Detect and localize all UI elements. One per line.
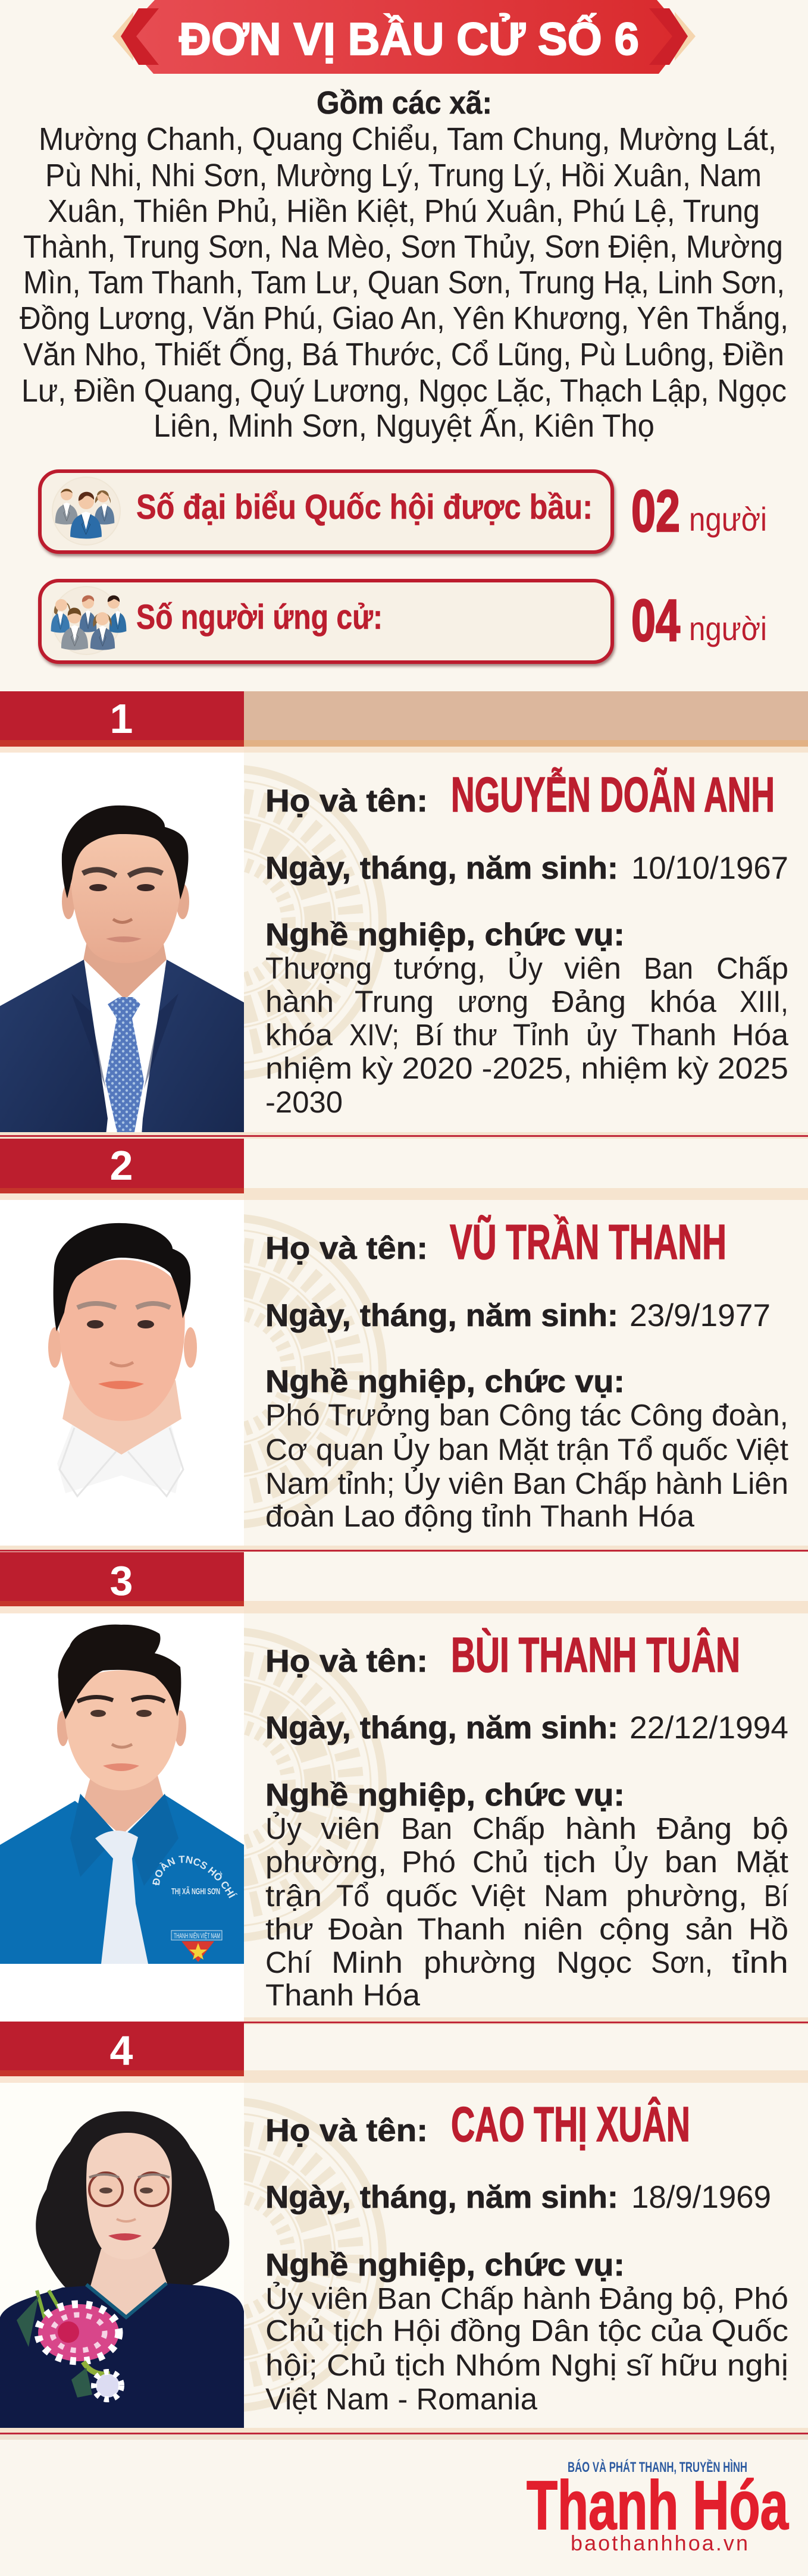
occupation 3: niên	[523, 1912, 583, 1946]
name row 3	[265, 1627, 740, 1682]
occupation 3: Tổ	[336, 1879, 369, 1913]
occupation 3: Phó	[402, 1845, 456, 1879]
stat box	[40, 471, 612, 552]
occupation 1: tướng,	[394, 951, 486, 985]
candidate name: CAO THỊ XUÂN	[451, 2096, 690, 2152]
header band 2	[0, 1139, 808, 1200]
occupation 4: Việt Nam - Romania	[265, 2382, 538, 2416]
icon: five people	[51, 587, 126, 654]
occupation 4: Nghề nghiệp, chức vụ:	[265, 2248, 625, 2283]
divider 3-4	[244, 2017, 808, 2025]
occupation 3: phường,	[265, 1845, 387, 1879]
birth date 3: 22/12/1994	[630, 1710, 788, 1745]
name row 1	[265, 767, 775, 822]
header band 1	[0, 691, 808, 753]
birth date 1: Ngày, tháng, năm sinh:	[265, 851, 618, 886]
occupation 1	[265, 917, 789, 1119]
occupation 1: ương	[458, 985, 528, 1019]
watermark drum	[244, 1628, 387, 1942]
birth date 1	[265, 851, 788, 886]
occupation 1: Tỉnh	[513, 1018, 569, 1052]
shirt badge	[152, 1856, 238, 1962]
divider 2-3	[0, 1546, 808, 1552]
bottom divider	[0, 2428, 808, 2440]
occupation 3: viên	[321, 1812, 380, 1845]
occupation 1: Chấp	[716, 951, 788, 985]
occupation 4: hội; Chủ tịch Nhóm Nghị sĩ hữu nghị	[265, 2348, 788, 2382]
occupation 1: Trung	[355, 985, 434, 1019]
occupation 3: Ngọc	[556, 1945, 632, 1979]
watermark drum	[244, 765, 387, 1079]
number 2: 2	[110, 1142, 133, 1189]
occupation 1: hành	[265, 985, 334, 1019]
occupation 1: -2030	[265, 1085, 343, 1119]
occupation 3: ban	[665, 1845, 718, 1879]
occupation 4	[265, 2248, 788, 2416]
occupation 2	[265, 1364, 788, 1533]
occupation 1: thư	[453, 1018, 497, 1052]
occupation 1: XIII,	[740, 985, 788, 1019]
commune names	[20, 121, 788, 444]
occupation 3: Sơn,	[651, 1945, 713, 1979]
occupation 1: nhiệm kỳ 2020 -2025, nhiệm kỳ 2025	[265, 1051, 788, 1085]
stat number: 04	[631, 587, 680, 653]
birth date 4: Ngày, tháng, năm sinh:	[265, 2180, 618, 2215]
birth date 2: Ngày, tháng, năm sinh:	[265, 1298, 618, 1333]
candidate 3	[0, 1552, 808, 2022]
footer logo	[527, 2459, 789, 2555]
icon: three people	[52, 477, 120, 545]
occupation 3: Ủy	[265, 1811, 302, 1845]
occupation 3: cộng	[599, 1912, 670, 1946]
shirt badge: THANH NIÊN VIỆT NAM	[174, 1931, 220, 1940]
stat unit: người	[689, 610, 767, 647]
occupation 3: quốc	[386, 1879, 458, 1913]
occupation 3: sản	[685, 1912, 733, 1946]
number 3: 3	[110, 1557, 133, 1604]
occupation 3: Bí	[764, 1879, 788, 1913]
divider 1-2	[0, 1132, 808, 1139]
birth date 4: 18/9/1969	[631, 2180, 771, 2215]
watermark drum	[244, 2098, 387, 2412]
occupation 1: Bí	[415, 1018, 443, 1052]
shirt badge: ĐOÀN TNCS HỒ CHÍ MINH	[152, 1856, 238, 1898]
occupation 2: Nam tỉnh; Ủy viên Ban Chấp hành Liên	[265, 1466, 788, 1500]
occupation 1: ủy	[586, 1018, 617, 1052]
name row 2	[265, 1214, 726, 1270]
commune names: Liên, Minh Sơn, Nguyệt Ấn, Kiên Thọ	[154, 408, 654, 444]
candidate 1	[0, 691, 808, 1135]
portrait 1	[0, 753, 244, 1135]
number 1: 1	[110, 695, 133, 742]
number 4: 4	[110, 2027, 133, 2074]
occupation 1: XIV;	[349, 1018, 399, 1052]
stat: deputies to elect	[40, 471, 767, 552]
occupation 1: Thượng	[265, 951, 372, 985]
occupation 3: Đoàn	[328, 1912, 403, 1946]
birth date 2	[265, 1298, 771, 1333]
occupation 3: Mặt	[735, 1845, 788, 1879]
label: full name: Họ và tên:	[265, 784, 428, 819]
title text: ĐƠN VỊ BẦU CỬ SỐ 6	[179, 13, 639, 65]
occupation 3: tỉnh	[732, 1945, 788, 1979]
occupation 2: đoàn Lao động tỉnh Thanh Hóa	[265, 1499, 695, 1533]
birth date 2: 23/9/1977	[630, 1298, 771, 1333]
birth date 3	[265, 1710, 788, 1745]
occupation 3: Chấp	[472, 1812, 545, 1845]
occupation 3: Việt	[471, 1879, 525, 1913]
commune list	[20, 85, 788, 444]
occupation 3: Chủ	[472, 1845, 528, 1879]
occupation 3: tịch	[544, 1845, 596, 1879]
occupation 3: Thanh	[417, 1912, 506, 1946]
portrait 2	[0, 1200, 244, 1546]
occupation 3: thư	[265, 1912, 314, 1946]
occupation 3: Ban	[401, 1812, 452, 1845]
occupation 4: Chủ tịch Hội đồng Dân tộc của Quốc	[265, 2314, 788, 2348]
name row 3: Họ và tên:	[265, 1644, 428, 1679]
occupation 3: Chí	[265, 1945, 312, 1979]
shirt badge: THỊ XÃ NGHI SƠN	[171, 1886, 220, 1897]
stat box	[40, 581, 612, 662]
occupation 3: Thanh Hóa	[265, 1978, 421, 2012]
name row 4: Họ và tên:	[265, 2113, 428, 2148]
commune names: Xuân, Thiên Phủ, Hiền Kiệt, Phú Xuân, Phú Lệ, Trung	[48, 193, 760, 229]
occupation 2: Cơ quan Ủy ban Mặt trận Tổ quốc Việt	[265, 1432, 788, 1466]
occupation 3: phường	[424, 1945, 536, 1979]
stat unit: người	[689, 500, 767, 538]
occupation 3: Minh	[331, 1945, 403, 1979]
stat label: Số đại biểu Quốc hội được bầu:	[136, 488, 593, 527]
stat label: Số người ứng cử:	[136, 598, 383, 637]
occupation 3: Nam	[544, 1879, 608, 1913]
occupation 3: trận	[265, 1879, 322, 1913]
stat: candidates	[40, 581, 767, 662]
portrait 4	[0, 2083, 244, 2428]
name row 2: Họ và tên:	[265, 1231, 428, 1266]
occupation 2: Nghề nghiệp, chức vụ:	[265, 1364, 625, 1399]
occupation 2: Phó Trưởng ban Công tác Công đoàn,	[265, 1398, 788, 1432]
occupation 3: Hồ	[749, 1912, 788, 1946]
watermark drum	[244, 1214, 387, 1528]
occupation 3: phường,	[626, 1879, 747, 1913]
birth date 1: 10/10/1967	[631, 851, 788, 886]
occupation 1: Đảng	[552, 985, 626, 1019]
occupation 1: Hóa	[732, 1018, 789, 1052]
website: baothanhhoa.vn	[571, 2531, 748, 2555]
candidate 4	[0, 2022, 808, 2428]
commune names: Pù Nhi, Nhi Sơn, Mường Lý, Trung Lý, Hồi Xuân, Nam	[45, 158, 762, 193]
commune names: Mường Chanh, Quang Chiểu, Tam Chung, Mường Lát,	[39, 121, 776, 157]
occupation 3	[265, 1778, 788, 2012]
occupation 1: khóa	[265, 1018, 333, 1052]
embroidered flower	[17, 2290, 121, 2399]
title banner	[112, 0, 696, 74]
occupation 1: viên	[564, 951, 621, 985]
occupation 3: Đảng	[657, 1812, 732, 1845]
name row 4	[265, 2096, 690, 2152]
occupation 1: Nghề nghiệp, chức vụ:	[265, 917, 625, 952]
occupation 1: Ủy	[508, 951, 543, 985]
birth date 4	[265, 2180, 771, 2215]
occupation 1: khóa	[650, 985, 717, 1019]
occupation 3: Ủy	[613, 1844, 648, 1879]
occupation 1: Ban	[644, 951, 693, 985]
portrait 3	[0, 1613, 244, 2022]
occupation 3: bộ	[752, 1812, 788, 1845]
occupation 1: Thanh	[631, 1018, 716, 1052]
header band 3	[0, 1552, 808, 1613]
birth date 3: Ngày, tháng, năm sinh:	[265, 1710, 618, 1745]
occupation 4: Ủy viên Ban Chấp hành Đảng bộ, Phó	[265, 2281, 788, 2315]
header band 4	[0, 2022, 808, 2083]
stat number: 02	[631, 478, 680, 544]
commune list heading: Gồm các xã:	[317, 85, 492, 121]
occupation 3: hành	[565, 1812, 637, 1845]
occupation 3: Nghề nghiệp, chức vụ:	[265, 1778, 625, 1813]
candidate 2	[0, 1139, 808, 1546]
